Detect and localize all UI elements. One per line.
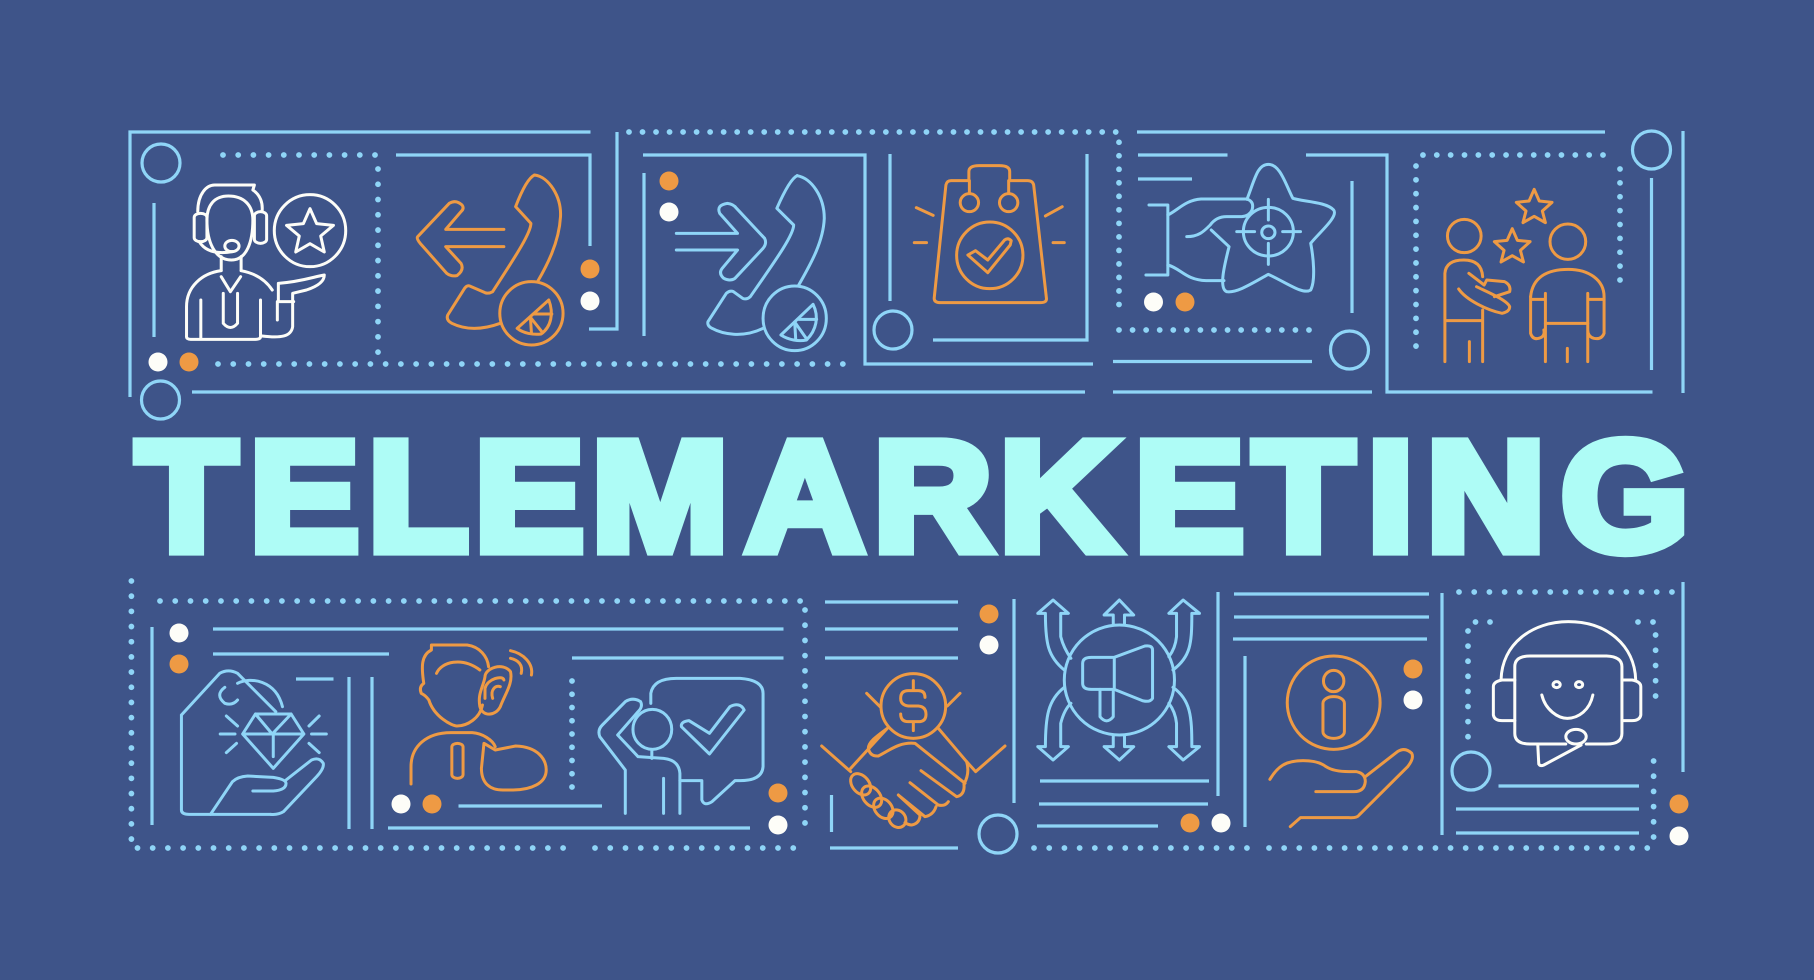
icon: megaphone with arrows [1038,600,1199,760]
icon: person pointing at checkmark bubble [599,678,763,813]
icon: inbound call with lemon [676,176,826,351]
title: TELEMARKETING [136,409,1689,583]
icon: listener with ear and speech bubble [411,645,546,790]
icon: smiling support chat bubble with headset [1493,622,1641,766]
icon: two people with stars [1445,189,1604,362]
panel: bottom icon row, right [1038,600,1641,827]
panel: bottom icon row, left [181,645,763,814]
icon: hand targeting star [1146,164,1334,292]
panel: top icon row, right [914,164,1604,362]
panel: top icon row, left [187,175,826,351]
icon: diamond tag in hand [181,671,326,814]
icon: outbound call with lemon [417,175,563,345]
icon: call agent with star [187,185,346,339]
icon: info symbol over hand [1270,656,1412,827]
icon: shopping bag with check [914,166,1064,303]
icon: handshake with dollar coin [822,674,1005,831]
